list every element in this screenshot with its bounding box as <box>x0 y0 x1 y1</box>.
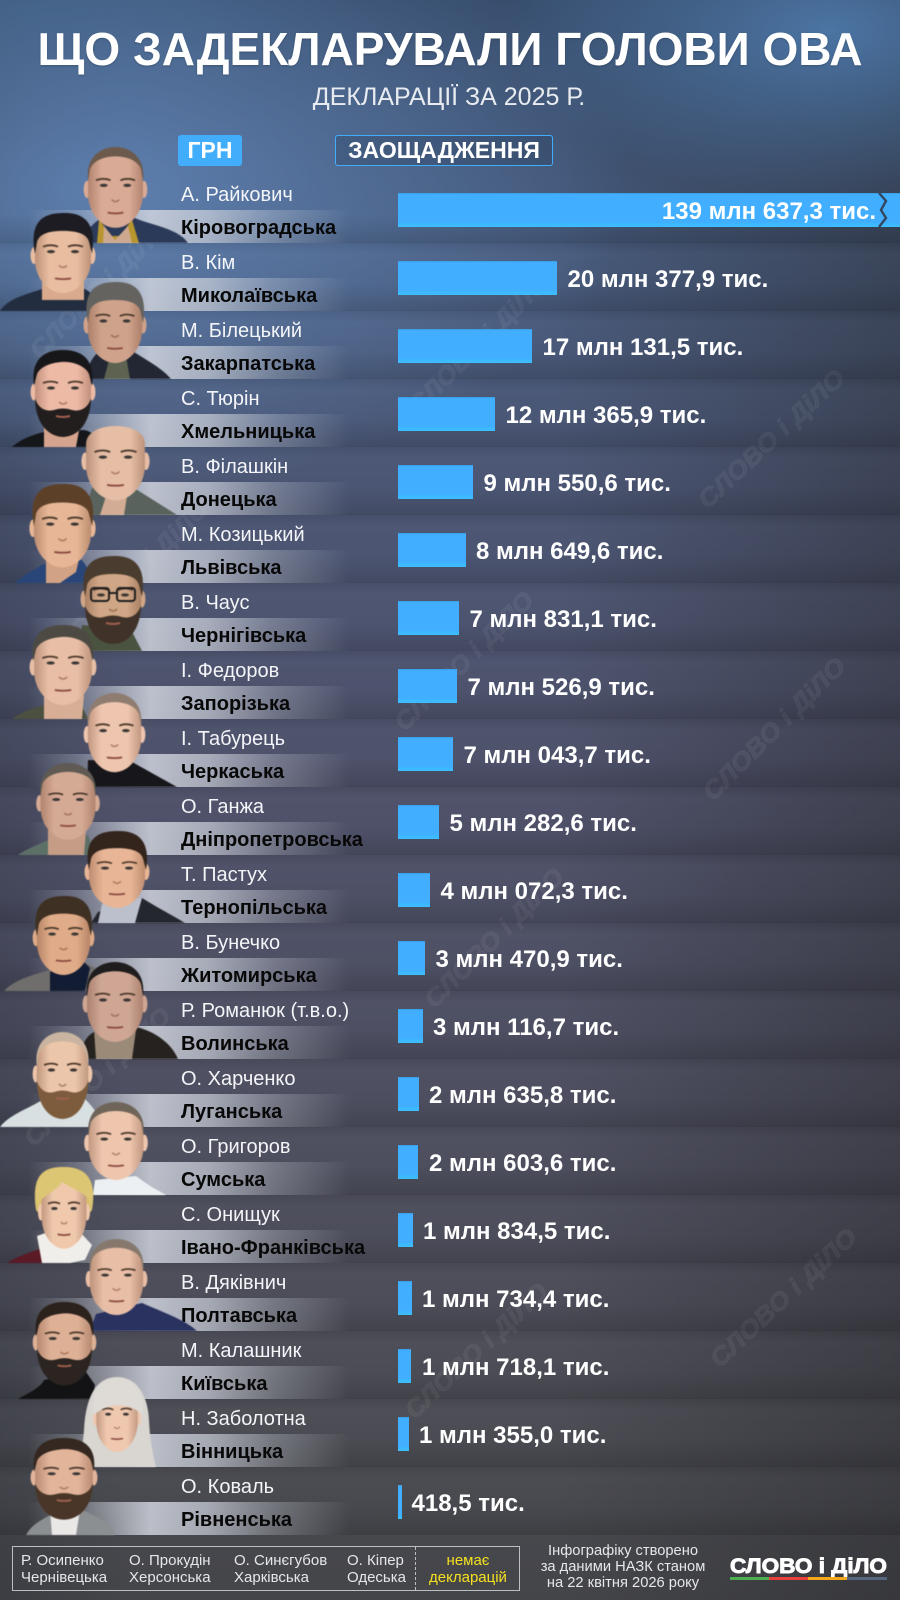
value: 8 млн 649,6 тис. <box>476 538 663 565</box>
person: Харківська <box>234 1569 309 1586</box>
value: 1 млн 718,1 тис. <box>422 1354 609 1381</box>
person: Одеська <box>347 1569 406 1586</box>
portrait: А. Райкович <box>82 147 188 243</box>
portrait: В. Кім <box>0 213 96 311</box>
region: Кіровоградська <box>181 216 336 238</box>
value: 7 млн 526,9 тис. <box>468 674 655 701</box>
region: Запорізька <box>181 692 290 714</box>
portrait: В. Чаус <box>78 556 146 651</box>
portrait: М. Калашник <box>18 1302 96 1399</box>
credits: Інфографіку створено <box>548 1543 698 1559</box>
person <box>129 1552 211 1586</box>
name: І. Федоров <box>181 660 279 682</box>
row: Кіровоградська <box>0 175 900 243</box>
region: Закарпатська <box>181 352 315 374</box>
bar <box>398 1485 402 1519</box>
bar <box>398 805 439 839</box>
watermarks: СЛОВО і ДіЛО <box>403 269 554 420</box>
portrait: М. Козицький <box>15 484 96 583</box>
value: 5 млн 282,6 тис. <box>450 810 637 837</box>
region: Рівненська <box>181 1508 292 1530</box>
row: Чернігівська <box>0 583 900 651</box>
watermarks: СЛОВО і ДіЛО <box>705 1223 863 1373</box>
name: В. Філашкін <box>181 456 288 478</box>
bar <box>398 737 453 771</box>
credits: на 22 квітня 2026 року <box>547 1575 699 1591</box>
region: Полтавська <box>181 1304 297 1326</box>
watermarks: СЛОВО і ДіЛО <box>419 863 570 1014</box>
portrait: Т. Пастух <box>84 831 185 923</box>
person: О. Кіпер <box>347 1552 404 1569</box>
portrait: М. Білецький <box>83 282 171 379</box>
value: 4 млн 072,3 тис. <box>440 878 628 905</box>
row: Хмельницька <box>0 379 900 447</box>
name: В. Кім <box>181 252 235 274</box>
row: Дніпропетровська <box>0 787 900 855</box>
bar <box>398 1009 422 1043</box>
value: 418,5 тис. <box>412 1490 525 1517</box>
value: 2 млн 603,6 тис. <box>429 1150 616 1177</box>
footer: no-declaration box <box>12 1546 520 1591</box>
name: В. Бунечко <box>181 932 280 954</box>
value: 7 млн 831,1 тис. <box>470 606 657 633</box>
bar <box>398 873 430 907</box>
region: Житомирська <box>181 964 317 986</box>
person <box>21 1552 108 1586</box>
row: Тернопільська <box>0 855 900 923</box>
person <box>234 1552 327 1586</box>
region: Черкаська <box>181 760 284 782</box>
bar <box>398 1281 412 1315</box>
credits <box>541 1543 705 1591</box>
value: 12 млн 365,9 тис. <box>506 402 706 429</box>
name: С. Онищук <box>181 1204 280 1226</box>
portrait: В. Філашкін <box>81 426 177 515</box>
region: Івано-Франківська <box>181 1236 365 1258</box>
value: 3 млн 116,7 тис. <box>433 1014 619 1041</box>
row: Івано-Франківська <box>0 1195 900 1263</box>
value: 9 млн 550,6 тис. <box>484 470 671 497</box>
portrait: О. Коваль <box>26 1438 115 1535</box>
watermarks: СЛОВО і ДіЛО <box>693 364 851 514</box>
portrait: Н. Заболотна <box>79 1377 156 1467</box>
row: Миколаївська <box>0 243 900 311</box>
region: Донецька <box>181 488 277 510</box>
bar <box>398 1213 412 1247</box>
bar <box>398 669 457 703</box>
portrait: О. Григоров <box>84 1102 166 1195</box>
row: Сумська <box>0 1127 900 1195</box>
name: М. Калашник <box>181 1340 301 1362</box>
row: Житомирська <box>0 923 900 991</box>
bar <box>398 261 557 295</box>
watermarks: СЛОВО і ДіЛО <box>24 214 175 365</box>
no declarations note: декларацій <box>429 1569 507 1586</box>
person: О. Прокудін <box>129 1552 211 1569</box>
watermarks: СЛОВО і ДіЛО <box>64 494 215 645</box>
person: Р. Осипенко <box>21 1552 104 1569</box>
person: Херсонська <box>129 1569 211 1586</box>
value: 1 млн 834,5 тис. <box>423 1218 610 1245</box>
region: Вінницька <box>181 1440 283 1462</box>
value: 139 млн 637,3 тис. <box>662 198 876 225</box>
name: В. Чаус <box>181 592 249 614</box>
bar <box>398 533 466 567</box>
row: Запорізька <box>0 651 900 719</box>
bar <box>398 601 459 635</box>
bar <box>398 193 900 227</box>
portrait: Р. Романюк <box>79 962 178 1059</box>
no declarations note <box>415 1547 520 1590</box>
credits: за даними НАЗК станом <box>541 1559 705 1575</box>
row: Львівська <box>0 515 900 583</box>
person: Чернівецька <box>21 1569 107 1586</box>
watermarks: СЛОВО і ДіЛО <box>697 652 852 806</box>
name: О. Коваль <box>181 1476 274 1498</box>
region: Хмельницька <box>181 420 315 442</box>
portrait: О. Ганжа <box>18 763 100 855</box>
row: Рівненська <box>0 1467 900 1535</box>
row: Луганська <box>0 1059 900 1127</box>
value: 7 млн 043,7 тис. <box>464 742 651 769</box>
region: Київська <box>181 1372 267 1394</box>
name: С. Тюрін <box>181 388 260 410</box>
watermarks: СЛОВО і ДіЛО <box>389 586 540 737</box>
value: 20 млн 377,9 тис. <box>568 266 768 293</box>
region: Сумська <box>181 1168 265 1190</box>
region: Луганська <box>181 1100 282 1122</box>
unit badge: ГРН <box>188 137 232 163</box>
bar <box>398 1349 411 1383</box>
name: О. Харченко <box>181 1068 296 1090</box>
category badge: ЗАОЩАДЖЕННЯ <box>348 137 540 163</box>
portrait: В. Бунечко <box>4 896 95 991</box>
row: Полтавська <box>0 1263 900 1331</box>
row: Волинська <box>0 991 900 1059</box>
portrait: С. Онищук <box>7 1167 93 1263</box>
name: Н. Заболотна <box>181 1408 306 1430</box>
name: Т. Пастух <box>181 864 267 886</box>
region: Тернопільська <box>181 896 327 918</box>
region: Волинська <box>181 1032 289 1054</box>
unit badge <box>178 135 242 166</box>
row: Донецька <box>0 447 900 515</box>
name: Р. Романюк (т.в.о.) <box>181 1000 349 1022</box>
watermarks: СЛОВО і ДіЛО <box>399 1277 554 1424</box>
value: 17 млн 131,5 тис. <box>542 334 743 361</box>
region: Миколаївська <box>181 284 317 306</box>
watermarks: СЛОВО і ДіЛО <box>19 1002 177 1152</box>
bar <box>398 329 532 363</box>
no declarations note: немає <box>447 1552 489 1569</box>
region: Львівська <box>181 556 282 578</box>
name: М. Козицький <box>181 524 305 546</box>
person: О. Синєгубов <box>234 1552 327 1569</box>
bar <box>398 1417 409 1451</box>
name: І. Табурець <box>181 728 285 750</box>
portrait: В. Дяківнич <box>86 1239 197 1331</box>
title: ЩО ЗАДЕКЛАРУВАЛИ ГОЛОВИ ОВА <box>38 23 862 75</box>
bar <box>398 1077 418 1111</box>
subtitle: ДЕКЛАРАЦІЇ ЗА 2025 Р. <box>313 83 585 111</box>
axis break mark <box>878 193 888 227</box>
value: 2 млн 635,8 тис. <box>429 1082 616 1109</box>
row: Черкаська <box>0 719 900 787</box>
region: Дніпропетровська <box>181 828 363 850</box>
name: В. Дяківнич <box>181 1272 286 1294</box>
portrait: О. Харченко <box>0 1032 98 1127</box>
value: 1 млн 734,4 тис. <box>422 1286 609 1313</box>
value: 3 млн 470,9 тис. <box>436 946 623 973</box>
portrait: С. Тюрін <box>12 350 96 447</box>
row: Вінницька <box>0 1399 900 1467</box>
row: Закарпатська <box>0 311 900 379</box>
name: А. Райкович <box>181 184 293 206</box>
name: М. Білецький <box>181 320 302 342</box>
region: Чернігівська <box>181 624 306 646</box>
value: 1 млн 355,0 тис. <box>419 1422 606 1449</box>
logo: СЛОВО і ДіЛО <box>730 1555 887 1578</box>
bar <box>398 941 425 975</box>
name: О. Григоров <box>181 1136 291 1158</box>
bar <box>398 465 473 499</box>
portrait: І. Табурець <box>84 693 177 787</box>
row: Київська <box>0 1331 900 1399</box>
portrait: І. Федоров <box>12 625 96 719</box>
person <box>347 1552 406 1586</box>
bar <box>398 1145 418 1179</box>
name: О. Ганжа <box>181 796 264 818</box>
bar <box>398 397 495 431</box>
